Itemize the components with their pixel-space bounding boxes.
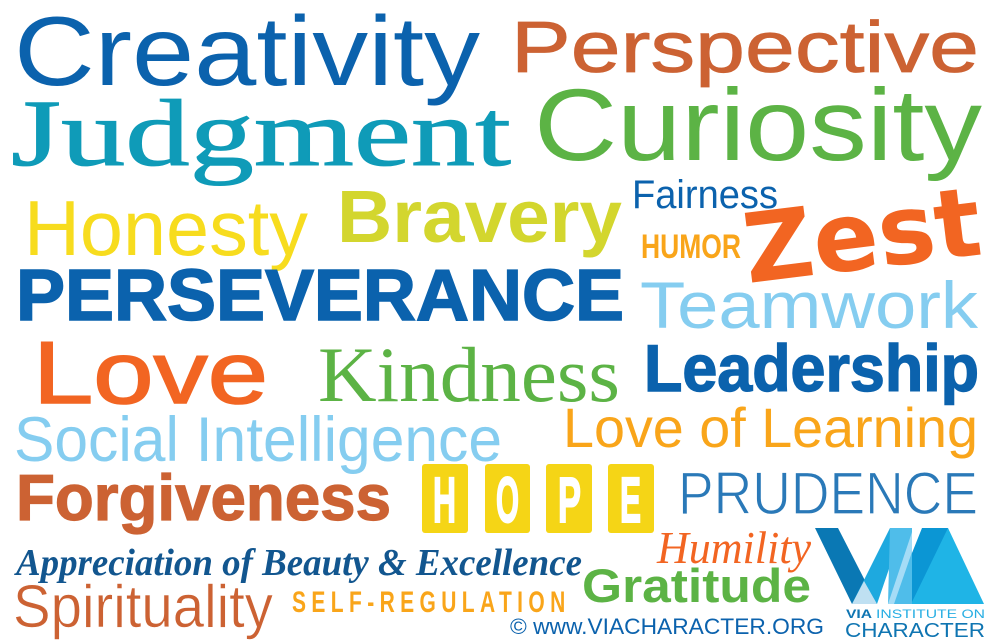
word: Self-Regulation: SELF-REGULATION [292, 587, 571, 619]
word tile: Hope: E [620, 464, 641, 536]
word: Forgiveness: Forgiveness [16, 461, 391, 534]
word: Love of Learning: Love of Learning [563, 396, 978, 459]
word: Gratitude: Gratitude [582, 559, 811, 612]
logo text: VIA [846, 609, 872, 621]
logo mark [815, 528, 984, 604]
word: Zest: Zest [737, 166, 987, 306]
word: Judgment: Judgment [11, 80, 511, 186]
word tile: Hope: O [496, 464, 519, 536]
word tile: Hope: H [433, 464, 456, 536]
word: Bravery: Bravery [337, 175, 622, 258]
word: Humor: HUMOR [641, 228, 741, 266]
word tile: Hope: P [558, 464, 581, 536]
logo: VIA Institute on Character [815, 528, 985, 642]
word: Leadership: Leadership [644, 331, 979, 405]
word: Social Intelligence: Social Intelligence [14, 405, 502, 475]
logo text: INSTITUTE ON [876, 609, 985, 621]
word: Humility: Humility [656, 522, 812, 573]
logo text: CHARACTER [845, 620, 985, 642]
word: Kindness: Kindness [318, 331, 620, 418]
word: Honesty: Honesty [24, 184, 308, 272]
word tile: Hope [422, 464, 654, 536]
word: Teamwork: Teamwork [640, 268, 979, 342]
word: Love: Love [33, 323, 268, 422]
word: Appreciation of Beauty & Excellence: Appreciation of Beauty & Excellence [14, 542, 582, 584]
word: Fairness: Fairness [632, 173, 778, 217]
word: Curiosity: Curiosity [534, 68, 982, 182]
word: Perseverance: PERSEVERANCE [16, 256, 624, 336]
word: Spirituality: Spirituality [13, 573, 273, 640]
logo text [845, 609, 985, 642]
word: Perspective: Perspective [511, 8, 979, 88]
copyright url: © www.VIACHARACTER.ORG [510, 614, 824, 639]
